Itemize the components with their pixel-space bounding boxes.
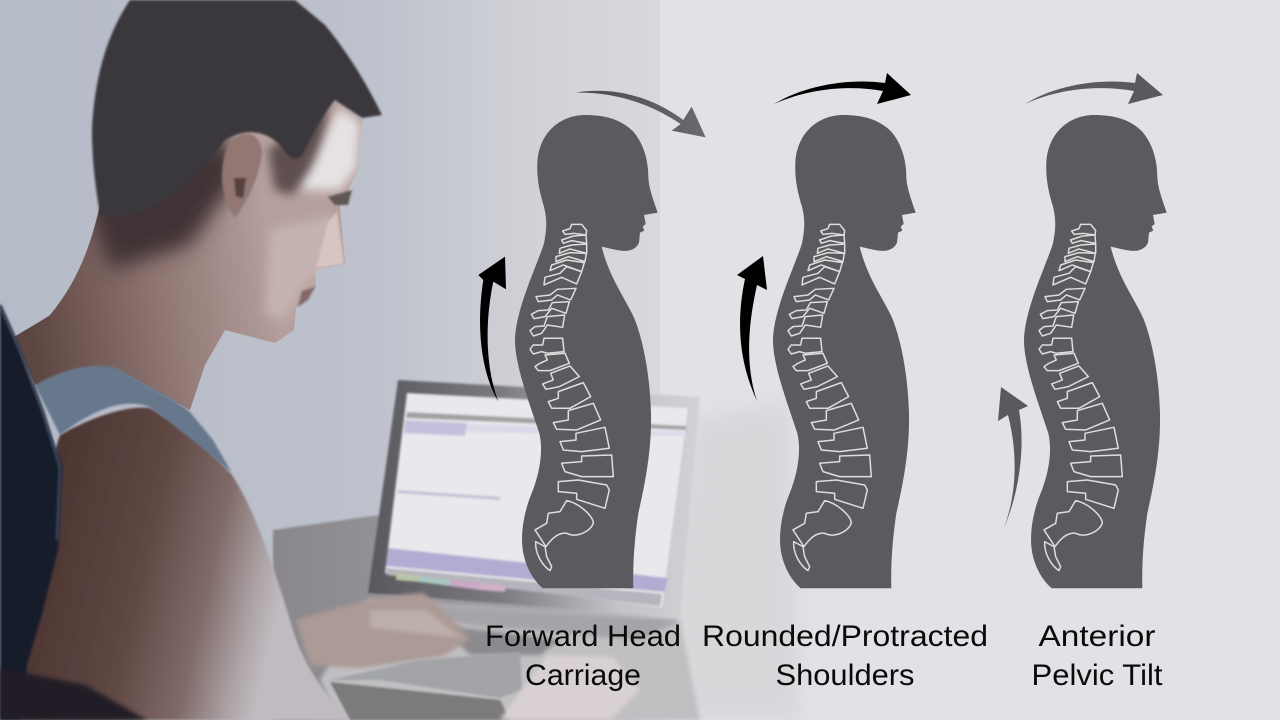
figure: anterior pelvic tilt silhouette and spine — [1024, 115, 1167, 588]
arrow: forward head back — [478, 257, 506, 402]
arrow: forward head top — [576, 91, 706, 137]
near hand — [296, 593, 470, 668]
cheek light — [265, 215, 335, 320]
label: forward head carriage: Forward Head — [485, 620, 681, 653]
label: anterior pelvic tilt: Anterior — [1038, 620, 1156, 653]
label: rounded protracted shoulders: Shoulders — [776, 659, 914, 692]
figure: forward head carriage silhouette and spine — [515, 115, 658, 588]
laptop screen — [385, 393, 688, 607]
label: anterior pelvic tilt — [1032, 620, 1163, 692]
photo: desk and laptop — [273, 380, 800, 720]
head and neck skin — [14, 100, 362, 410]
figure: rounded shoulders silhouette and spine — [773, 115, 916, 588]
label: anterior pelvic tilt: Pelvic Tilt — [1032, 659, 1163, 692]
dark lower garment — [0, 668, 147, 720]
neck and face base — [14, 100, 362, 410]
photo: man at desk — [0, 0, 382, 720]
ear — [222, 134, 262, 218]
arrow: pelvic tilt back — [998, 387, 1028, 528]
nose highlight — [316, 212, 344, 268]
trackpad — [330, 652, 522, 698]
eye — [328, 190, 352, 205]
keyboard deck — [320, 600, 700, 720]
temple stubble shadow — [268, 105, 330, 195]
chair back — [0, 305, 62, 720]
right side soft blur — [660, 400, 800, 720]
label: forward head carriage: Carriage — [525, 659, 641, 692]
arrow: rounded shoulders top — [774, 73, 911, 104]
hair — [92, 0, 382, 217]
mouth shade — [298, 287, 315, 307]
tank top strap — [35, 366, 232, 473]
arrow: rounded shoulders back — [737, 256, 767, 401]
forehead highlight — [300, 108, 360, 190]
under-hair shadow — [85, 135, 240, 270]
far hand — [500, 655, 640, 720]
arrow: pelvic tilt top — [1025, 73, 1163, 104]
label: rounded protracted shoulders: Rounded/Protracted — [702, 620, 988, 653]
desk — [273, 500, 700, 720]
label: forward head carriage — [485, 620, 681, 692]
shoulder and arm — [20, 407, 350, 720]
laptop lid — [368, 380, 700, 617]
label: rounded protracted shoulders — [702, 620, 988, 692]
